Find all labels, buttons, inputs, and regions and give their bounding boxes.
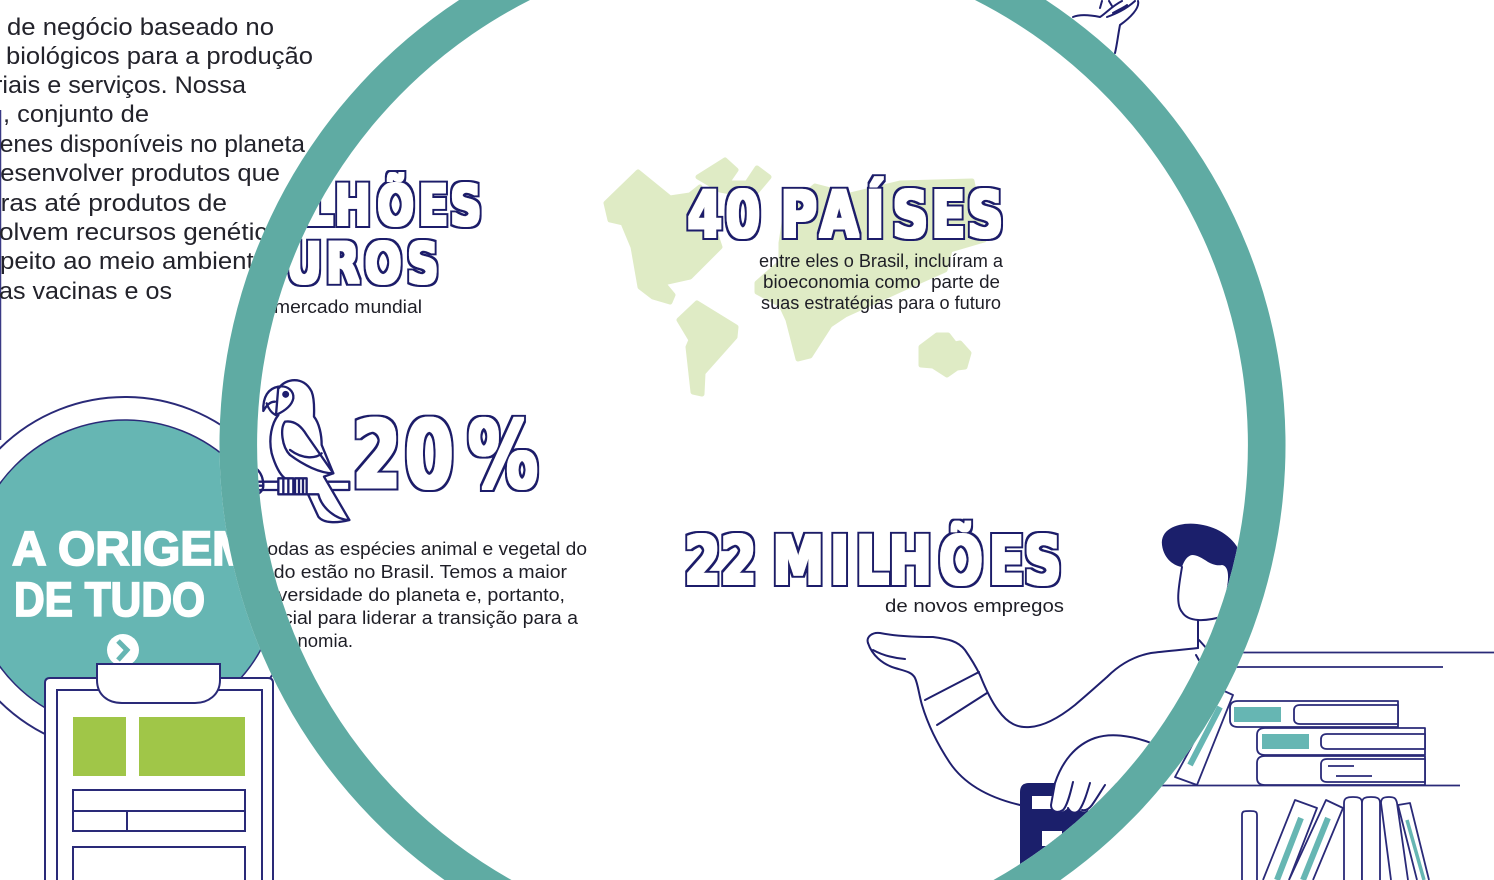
icon: person — [868, 524, 1240, 830]
stat: 40 países: suas estratégias para o futuro — [761, 293, 1001, 313]
panel: outside shelf scene — [1160, 652, 1494, 880]
icon: stacked book one — [1230, 701, 1398, 727]
intro paragraph: olvem recursos genéticos — [0, 219, 295, 246]
intro paragraph: as vacinas e os — [0, 278, 172, 305]
ring: left arc — [219, 0, 530, 880]
intro paragraph: riais e serviços. Nossa — [0, 72, 247, 99]
outlined number 40 países: 40 PAÍSES — [688, 176, 1003, 252]
ring: right arc — [975, 0, 1286, 880]
outlined number 22 milhões: 22 MILHÕES — [685, 522, 1061, 599]
heading: a origem de tudo — [12, 523, 252, 627]
intro paragraph: , conjunto de — [3, 101, 149, 128]
icon: parrot — [256, 380, 349, 522]
heading: a origem de tudo: A ORIGEM — [12, 523, 252, 576]
stat: 20%: 20% — [353, 402, 538, 510]
panel: white circle interior — [219, 0, 1286, 880]
icon: upright books — [1242, 797, 1429, 880]
text block: biodiversity paragraph: bioeconomia. — [243, 631, 353, 651]
intro paragraph: biológicos para a produção — [6, 43, 313, 70]
map: world — [606, 160, 984, 394]
stat: 22 milhões: de novos empregos — [885, 596, 1064, 616]
stat: 40 países: bioeconomia como parte de — [763, 272, 1000, 292]
text block: biodiversity paragraph: potencial para liderar a transição para a — [234, 608, 579, 628]
intro paragraph: peito ao meio ambiente — [0, 248, 268, 275]
text block: biodiversity paragraph: mundo estão no Brasil. Temos a maior — [236, 562, 567, 582]
icon: stacked book two — [1257, 728, 1425, 755]
outlined word euros: EUROS — [253, 231, 438, 296]
heading: a origem de tudo: DE TUDO — [14, 574, 205, 627]
text block: biodiversity paragraph: biodiversidade do planeta e, portanto, — [236, 585, 565, 605]
icon: arrow button — [107, 634, 139, 666]
panel: circle contents — [233, 160, 1240, 880]
stat: milhões de euros: mercado mundial — [274, 297, 422, 317]
icon: navy book — [1020, 783, 1116, 864]
icon: leaning book — [1175, 690, 1233, 785]
icon: stacked book three — [1257, 756, 1425, 785]
intro paragraph — [0, 14, 313, 305]
icon: stacked books inside circle — [1074, 810, 1088, 824]
outlined word milhões: MILHÕES — [233, 172, 481, 238]
icon: hand at top right — [1073, 1, 1138, 53]
stat: 40 países: entre eles o Brasil, incluíram a — [759, 251, 1004, 271]
icon: hand on book — [1050, 734, 1150, 812]
panel: outside left text — [0, 14, 313, 440]
panel: A origem de tudo circle — [0, 397, 303, 753]
icon: clipboard — [45, 664, 273, 880]
stat: milhões de euros — [275, 170, 482, 313]
text block: biodiversity paragraph — [268, 542, 586, 647]
stat: 22 milhões — [685, 522, 1064, 616]
stat: 40 países — [688, 176, 1004, 313]
text block: biodiversity paragraph: todas as espécies animal e vegetal do — [262, 539, 587, 559]
intro paragraph: de negócio baseado no — [7, 14, 274, 41]
